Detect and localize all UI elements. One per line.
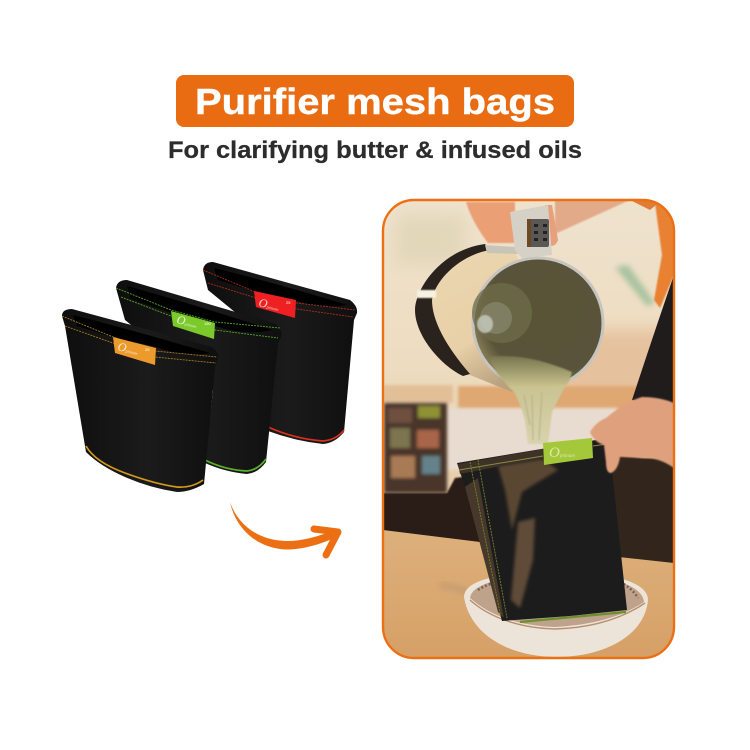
bag: green	[116, 280, 281, 474]
photo frame	[383, 200, 674, 658]
product: three mesh bags	[62, 262, 357, 492]
subtitle: For clarifying butter & infused oils	[168, 137, 582, 164]
dark counter and body	[383, 455, 674, 570]
tag: green: Optimum	[175, 312, 199, 331]
jug opening	[472, 258, 603, 388]
tag: red: 25	[286, 300, 291, 305]
tag: orange	[113, 337, 156, 365]
title badge	[176, 75, 574, 127]
steel jug	[415, 205, 603, 392]
bag tag: Optimum	[549, 445, 575, 461]
mesh bag held open	[457, 438, 627, 622]
title badge: Purifier mesh bags	[195, 81, 555, 122]
arm and pouring hand	[466, 200, 630, 246]
ceramic bowl	[464, 572, 648, 657]
shelf with colourful items	[384, 403, 447, 493]
photo panel: pouring through mesh bag	[383, 200, 674, 660]
bag: red	[203, 262, 357, 444]
bag: orange	[62, 309, 218, 492]
jug body	[432, 251, 518, 392]
tag: red: Optimum	[257, 295, 281, 314]
wooden table	[383, 530, 674, 660]
photo background	[383, 200, 674, 500]
jug handle	[510, 205, 552, 258]
tag: green	[171, 311, 215, 339]
tag: green: 150	[204, 321, 211, 326]
jug dark band	[415, 244, 490, 376]
orange shirt and dark apron	[630, 200, 674, 406]
infused butter stream	[488, 356, 572, 444]
tag: orange: 25	[145, 347, 150, 352]
bag tag	[543, 438, 593, 465]
tag: red	[254, 291, 296, 318]
tag: orange: Optimum	[116, 339, 140, 358]
arrow	[230, 502, 338, 555]
hand holding bag	[590, 397, 674, 473]
